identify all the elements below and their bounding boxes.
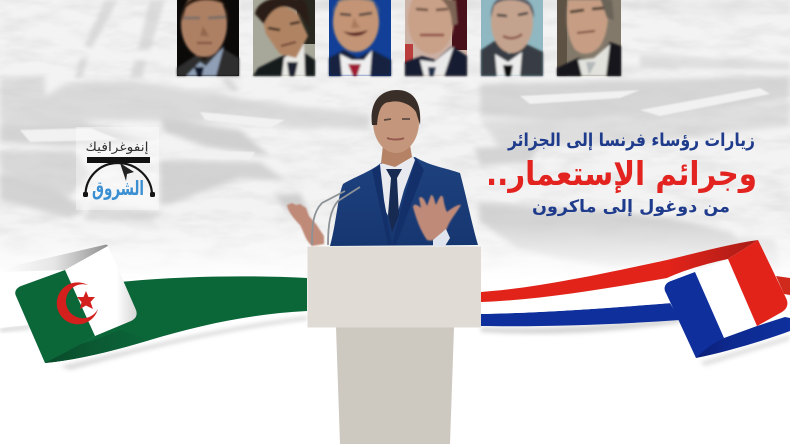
- facial features: [384, 119, 410, 120]
- flag face: [65, 246, 137, 336]
- head: [373, 91, 419, 153]
- logo wordmark: الشروق: [92, 176, 144, 200]
- Algerian flag ribbon: [0, 245, 307, 370]
- lectern: [308, 246, 481, 444]
- ribbon tail: [45, 276, 307, 363]
- grey fold: [0, 245, 108, 272]
- portrait 6: [557, 0, 621, 76]
- title text: [486, 130, 757, 217]
- white stripe: [481, 278, 672, 314]
- white ribbon tail: [0, 270, 65, 328]
- blue stripe: [481, 303, 680, 326]
- left hand: [287, 203, 324, 246]
- title line 3: من دوغول إلى ماكرون: [532, 197, 730, 217]
- ribbon shadow: [481, 318, 680, 334]
- tie: [386, 169, 402, 232]
- row of six portraits: [177, 0, 621, 76]
- logo: Shorouk infographic: [76, 127, 159, 210]
- red tail right: [776, 276, 790, 295]
- crescent and star: [57, 282, 98, 324]
- microphones: [312, 187, 360, 245]
- portrait 1: [177, 0, 239, 76]
- lapels: [372, 158, 424, 245]
- right hand: [413, 195, 461, 240]
- portrait 3: [329, 0, 391, 76]
- shirt: [380, 155, 415, 226]
- neck: [381, 145, 412, 167]
- title line 2: وجرائم الإستعمار..: [486, 154, 757, 194]
- lectern top: [308, 246, 481, 328]
- torso suit: [330, 157, 478, 246]
- portrait 4: [405, 0, 467, 76]
- red stripe: [481, 240, 758, 302]
- flag face: [695, 259, 757, 338]
- ribbon shadow: [60, 316, 307, 370]
- logo label: إنفوغرافيك: [86, 139, 148, 155]
- hair: [372, 90, 420, 125]
- title line 1: زيارات رؤساء فرنسا إلى الجزائر: [507, 130, 755, 151]
- icon: cursor: [120, 163, 134, 181]
- lower fold: [696, 317, 790, 358]
- speaker figure: [287, 90, 478, 246]
- lectern column: [336, 327, 454, 444]
- right cuff: [433, 229, 450, 246]
- portrait 5: [481, 0, 543, 76]
- French flag ribbon: [481, 240, 790, 366]
- portrait 2: [253, 0, 315, 76]
